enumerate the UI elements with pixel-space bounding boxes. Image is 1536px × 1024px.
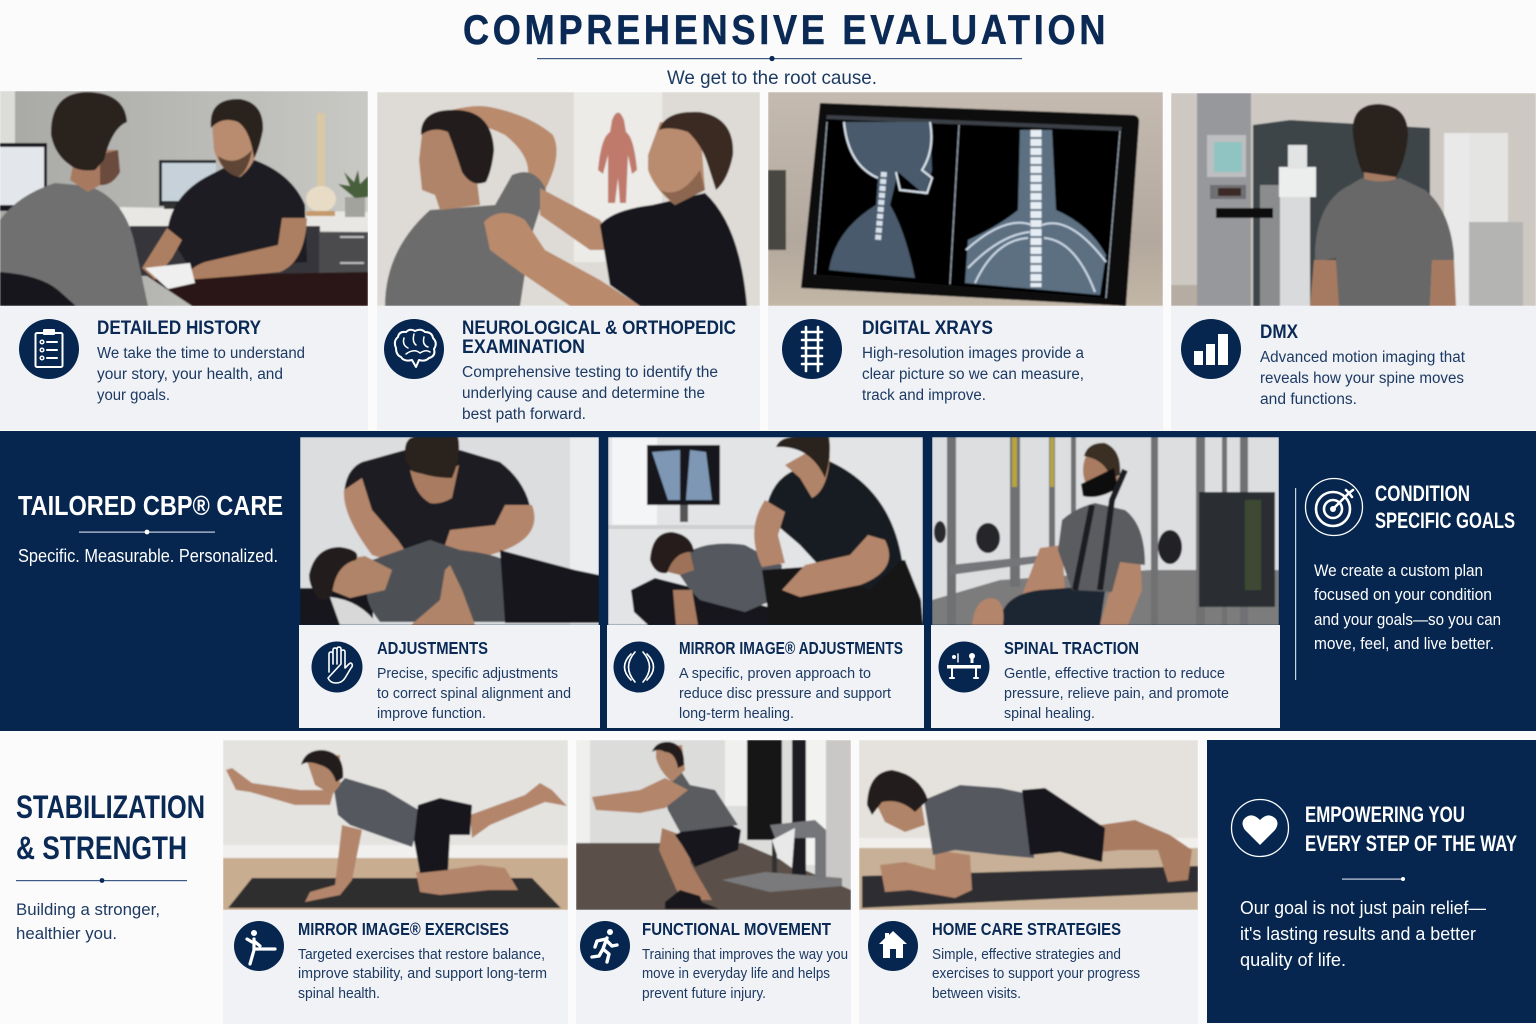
text block: improve stability, and support long-term: [298, 966, 547, 982]
text block: between visits.: [932, 986, 1021, 1002]
tagline: Specific. Measurable. Personalized.: [18, 546, 278, 566]
text block: spinal healing.: [1004, 706, 1095, 722]
photo: bird dog exercise: [223, 740, 568, 910]
icon: target: [1306, 478, 1362, 536]
panel: empowering you: [1207, 740, 1536, 1023]
heading: [1305, 802, 1517, 856]
text block: improve function.: [377, 706, 486, 722]
icon: runner: [580, 921, 630, 971]
text block: [1004, 666, 1229, 722]
text block: focused on your condition: [1314, 586, 1492, 604]
card: adjustments: [299, 437, 600, 728]
icon: bar chart: [1181, 319, 1241, 379]
heading: MIRROR IMAGE® EXERCISES: [298, 919, 509, 939]
heading: DIGITAL XRAYS: [862, 317, 993, 339]
card: spinal traction: [931, 437, 1280, 728]
text block: [862, 345, 1084, 404]
heading: MIRROR IMAGE® ADJUSTMENTS: [679, 638, 903, 658]
text block: prevent future injury.: [642, 986, 766, 1002]
text block: to correct spinal alignment and: [377, 686, 571, 702]
panel: DMX: [1171, 93, 1536, 430]
text block: underlying cause and determine the: [462, 385, 705, 402]
text block: [97, 345, 305, 404]
text block: reveals how your spine moves: [1260, 370, 1464, 387]
subtitle: We get to the root cause.: [667, 67, 877, 89]
heading: HOME CARE STRATEGIES: [932, 919, 1121, 939]
icon: traction table: [938, 642, 990, 692]
photo: traction rig: [932, 437, 1279, 625]
photo: squat exercise: [576, 740, 851, 910]
text block: [932, 947, 1140, 1002]
text block: and your goals—so you can: [1314, 611, 1501, 629]
text block: We create a custom plan: [1314, 562, 1483, 580]
text block: Simple, effective strategies and: [932, 947, 1121, 963]
text block: [1314, 562, 1501, 653]
text block: it's lasting results and a better: [1240, 924, 1476, 944]
text block: and functions.: [1260, 391, 1357, 408]
photo: motion imaging machine: [1171, 93, 1536, 306]
icon: kick exercise: [234, 921, 284, 971]
text block: best path forward.: [462, 406, 586, 423]
text block: exercises to support your progress: [932, 966, 1140, 982]
text block: reduce disc pressure and support: [679, 686, 891, 702]
text block: [1240, 898, 1486, 970]
icon: mirrored arcs: [614, 642, 664, 692]
text block: clear picture so we can measure,: [862, 366, 1084, 383]
text block: Targeted exercises that restore balance,: [298, 947, 545, 963]
text block: Training that improves the way you: [642, 947, 848, 963]
text block: Precise, specific adjustments: [377, 666, 558, 682]
heading: & STRENGTH: [16, 830, 187, 866]
photo: side adjustment: [300, 437, 599, 625]
heading: CONDITION: [1375, 481, 1470, 506]
icon: spine: [782, 319, 842, 379]
heading: ADJUSTMENTS: [377, 638, 488, 658]
photo: plank exercise: [859, 740, 1198, 910]
photo: history consultation: [0, 91, 368, 306]
card: mirror image exercises: [223, 740, 568, 1024]
heading: EMPOWERING YOU: [1305, 802, 1465, 827]
text block: [377, 666, 571, 722]
text block: [1260, 349, 1466, 408]
panel: stabilization and strength intro: [16, 789, 205, 943]
panel: condition specific goals: [1295, 478, 1515, 680]
text block: Our goal is not just pain relief—: [1240, 898, 1486, 918]
text block: your story, your health, and: [97, 366, 283, 383]
photo: shoulder examination: [377, 92, 760, 306]
text block: long-term healing.: [679, 706, 794, 722]
text block: move, feel, and live better.: [1314, 635, 1494, 653]
panel: tailored CBP care band: [0, 431, 1536, 731]
text block: [679, 666, 891, 722]
photo: mirror image adjustment: [608, 437, 923, 625]
icon: clipboard: [19, 319, 79, 379]
title divider: [537, 56, 1022, 61]
panel: detailed history: [0, 91, 368, 430]
text block: your goals.: [97, 387, 170, 404]
title: COMPREHENSIVE EVALUATION: [463, 8, 1105, 54]
text block: move in everyday life and helps: [642, 966, 830, 982]
text block: quality of life.: [1240, 950, 1346, 970]
text block: Advanced motion imaging that: [1260, 349, 1466, 366]
divider: [1342, 877, 1405, 881]
divider: [16, 878, 187, 883]
icon: heart: [1232, 800, 1288, 856]
text block: [642, 947, 848, 1002]
card: mirror image adjustments: [607, 437, 924, 728]
photo: xray monitor: [768, 92, 1163, 306]
icon: house: [868, 921, 918, 971]
text block: Comprehensive testing to identify the: [462, 364, 718, 381]
heading: DETAILED HISTORY: [97, 317, 261, 339]
text block: spinal health.: [298, 986, 380, 1002]
heading: TAILORED CBP® CARE: [18, 490, 283, 521]
heading: [462, 317, 736, 358]
panel: digital xrays: [768, 92, 1163, 430]
icon: brain: [384, 319, 444, 379]
icon: hand: [312, 642, 362, 692]
heading: EXAMINATION: [462, 336, 585, 358]
heading: NEUROLOGICAL & ORTHOPEDIC: [462, 317, 736, 339]
heading: DMX: [1260, 321, 1298, 343]
text block: track and improve.: [862, 387, 986, 404]
card: home care strategies: [859, 740, 1198, 1024]
heading: [1375, 481, 1515, 533]
text block: [462, 364, 718, 423]
text block: [16, 900, 160, 943]
heading: STABILIZATION: [16, 789, 205, 825]
text block: [298, 947, 547, 1002]
text block: healthier you.: [16, 924, 117, 943]
text block: High-resolution images provide a: [862, 345, 1084, 362]
divider: [79, 530, 215, 534]
text block: We take the time to understand: [97, 345, 305, 362]
text block: Building a stronger,: [16, 900, 160, 919]
panel: neurological and orthopedic examination: [377, 92, 760, 430]
text block: Gentle, effective traction to reduce: [1004, 666, 1225, 682]
card: functional movement: [576, 740, 851, 1024]
text block: pressure, relieve pain, and promote: [1004, 686, 1229, 702]
heading: [16, 789, 205, 866]
heading: FUNCTIONAL MOVEMENT: [642, 919, 831, 939]
heading: SPINAL TRACTION: [1004, 638, 1139, 658]
text block: A specific, proven approach to: [679, 666, 871, 682]
